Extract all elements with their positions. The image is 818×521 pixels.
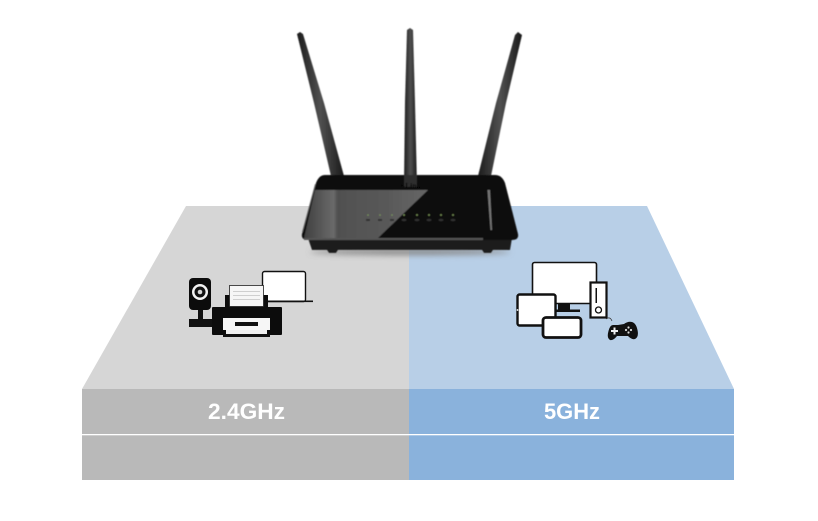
icon: 5GHz devices (monitor, tablet, tower, phone, gamepad) xyxy=(517,262,638,340)
router xyxy=(297,28,522,255)
label: 2.4GHz: 2.4GHz xyxy=(208,399,285,424)
icon: tablet xyxy=(517,294,556,326)
router highlight: right stripe xyxy=(488,190,492,230)
icon: webcam xyxy=(189,278,214,327)
panel: 2.4GHz floor xyxy=(82,206,409,389)
panel: 2.4GHz band xyxy=(82,389,409,480)
icon: printer xyxy=(212,286,282,337)
logo: D-Link: D-Link xyxy=(397,181,421,190)
router highlight: left edge xyxy=(302,184,316,232)
panel: 5GHz floor xyxy=(409,206,734,389)
router glossy panel xyxy=(304,190,428,238)
antenna: center xyxy=(404,28,417,186)
router base with ports and feet xyxy=(308,238,512,253)
antenna: left xyxy=(297,32,344,176)
router highlight: front edge xyxy=(304,238,483,240)
icon: tower console xyxy=(590,282,606,318)
icon: 2.4GHz devices (camera, laptop, printer) xyxy=(189,272,313,337)
label: 5GHz: 5GHz xyxy=(544,399,600,424)
icon: phone xyxy=(543,318,581,338)
icon: laptop xyxy=(262,272,313,302)
status LEDs xyxy=(367,214,454,216)
antenna: right xyxy=(478,32,522,176)
router body xyxy=(302,175,518,240)
icon: monitor xyxy=(532,262,596,312)
center antenna reflection xyxy=(404,175,417,187)
panel: 5GHz band xyxy=(409,389,734,480)
icon: game controller xyxy=(606,318,638,340)
